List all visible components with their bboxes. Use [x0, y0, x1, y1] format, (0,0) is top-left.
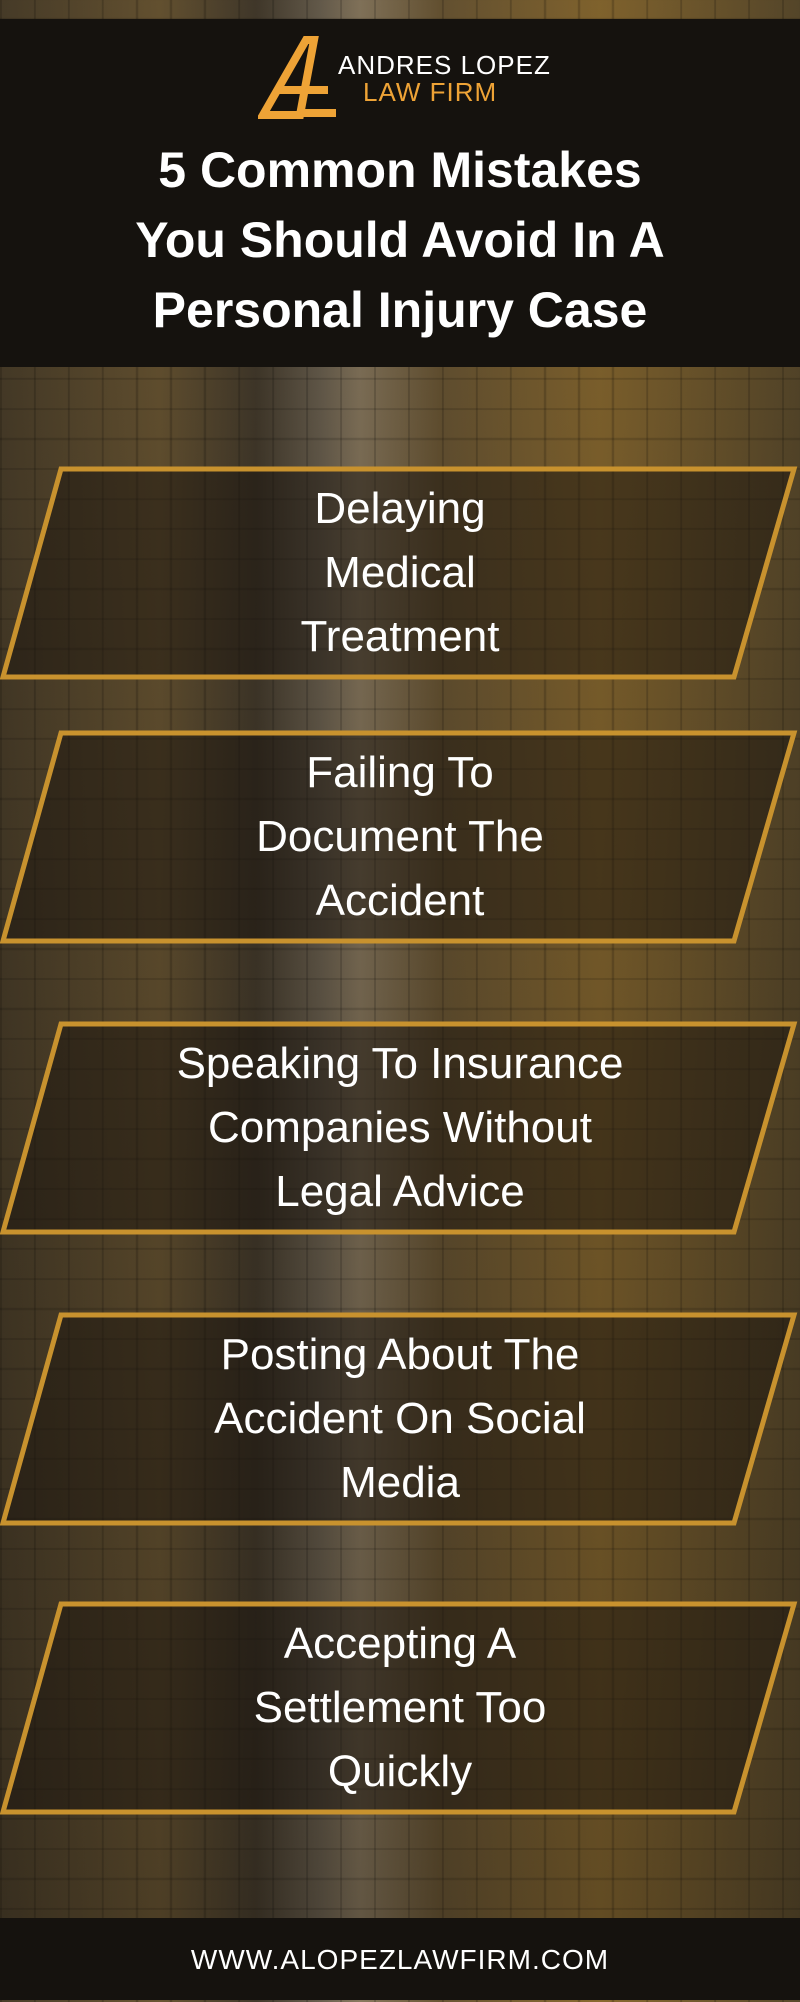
title: Personal Injury Case	[153, 282, 647, 338]
logo text: ANDRES LOPEZ	[338, 50, 551, 80]
panel: mistake 5: Settlement Too	[254, 1683, 546, 1732]
panel: mistake 4	[0, 1312, 798, 1526]
footer: WWW.ALOPEZLAWFIRM.COM	[191, 1944, 609, 1975]
panel: mistake 3: Companies Without	[208, 1103, 592, 1152]
panel: mistake 5	[0, 1602, 798, 1814]
header	[0, 19, 800, 367]
title	[135, 142, 665, 338]
panel: mistake 4: Media	[340, 1458, 460, 1507]
panel: mistake 5: Quickly	[328, 1747, 472, 1796]
panel: mistake 2: Failing To	[306, 748, 494, 797]
panel: mistake 1: Treatment	[301, 612, 499, 661]
panel: mistake 5: Accepting A	[284, 1619, 516, 1668]
panel: mistake 1: Medical	[324, 548, 476, 597]
logo	[258, 36, 551, 119]
panel: mistake 2: Accident	[316, 876, 484, 925]
panel: mistake 2: Document The	[256, 812, 544, 861]
icon: logo AL	[258, 36, 336, 119]
panel: mistake 3: Legal Advice	[275, 1167, 525, 1216]
title: You Should Avoid In A	[135, 212, 665, 268]
panel: mistake 3	[0, 1022, 798, 1234]
logo text	[338, 50, 551, 107]
panel: mistake 1	[0, 466, 798, 680]
panel: mistake 2	[0, 730, 798, 944]
panel: mistake 1: Delaying	[314, 484, 486, 533]
panel: mistake 3: Speaking To Insurance	[177, 1039, 623, 1088]
panel: mistake 4: Posting About The	[221, 1330, 579, 1379]
panel: mistake 4: Accident On Social	[214, 1394, 586, 1443]
title: 5 Common Mistakes	[158, 142, 642, 198]
footer	[0, 1918, 800, 2000]
logo text: LAW FIRM	[363, 77, 497, 107]
